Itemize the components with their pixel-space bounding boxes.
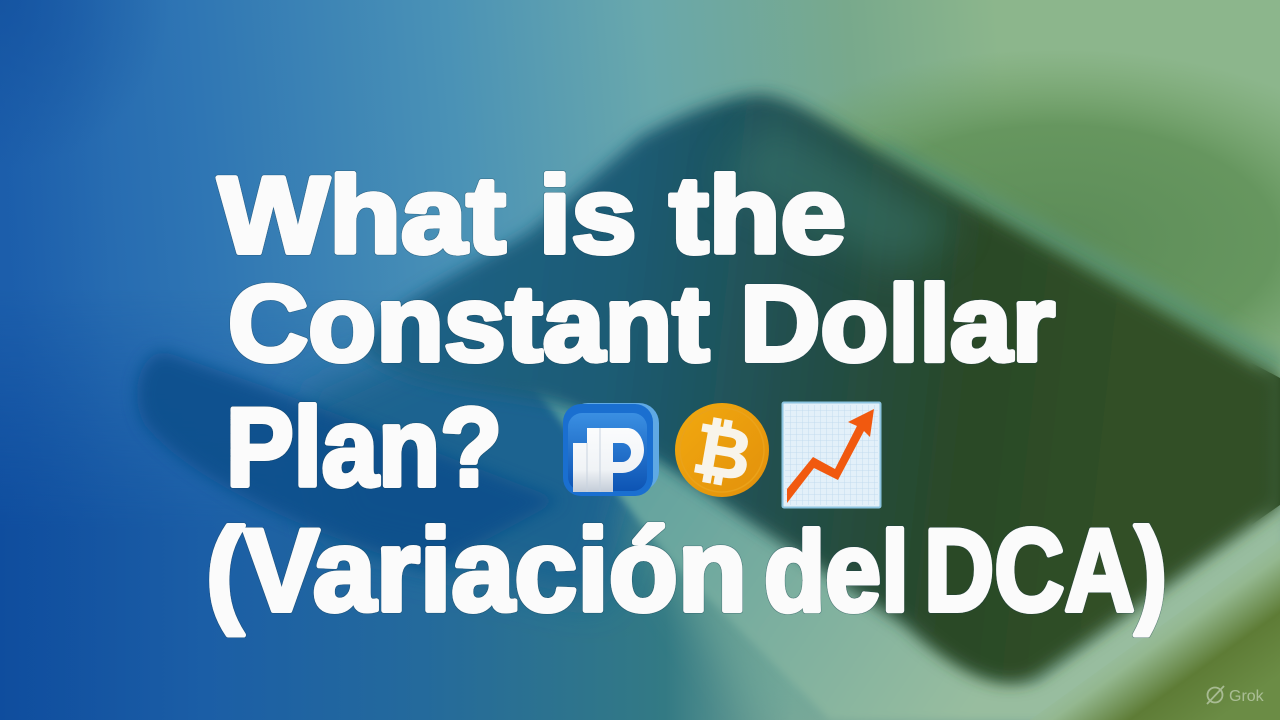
lower right corner — [1030, 540, 1280, 720]
title line 2: Constant Dollar — [228, 262, 1055, 384]
dark zone under the phone — [300, 300, 650, 600]
title — [206, 154, 1167, 636]
upper right green — [640, 0, 1280, 500]
icon: blue P app — [563, 403, 659, 496]
phone top soft highlight — [720, 120, 960, 270]
title line 4: DCA: DCA) — [924, 504, 1167, 636]
phone edge highlight — [880, 150, 1280, 368]
title line 3: Plan? — [226, 386, 502, 510]
lower left soft band — [620, 500, 830, 720]
title line 1: What is the — [218, 154, 846, 276]
stylus — [137, 352, 560, 570]
icon: bitcoin coin: ₿ — [687, 407, 758, 497]
watermark: Grok: Grok — [1229, 688, 1265, 705]
phone right edge fill — [1250, 362, 1280, 526]
lower area tint — [0, 355, 1280, 720]
icon: Grok logo — [1207, 686, 1224, 704]
icon: rising chart — [782, 402, 880, 508]
phone body — [360, 95, 1280, 683]
title line 4: Variación: (Variación — [206, 504, 747, 636]
watermark: Grok — [1207, 686, 1265, 705]
title line 4: del: del — [764, 508, 909, 634]
light lower phone band — [505, 350, 1280, 720]
